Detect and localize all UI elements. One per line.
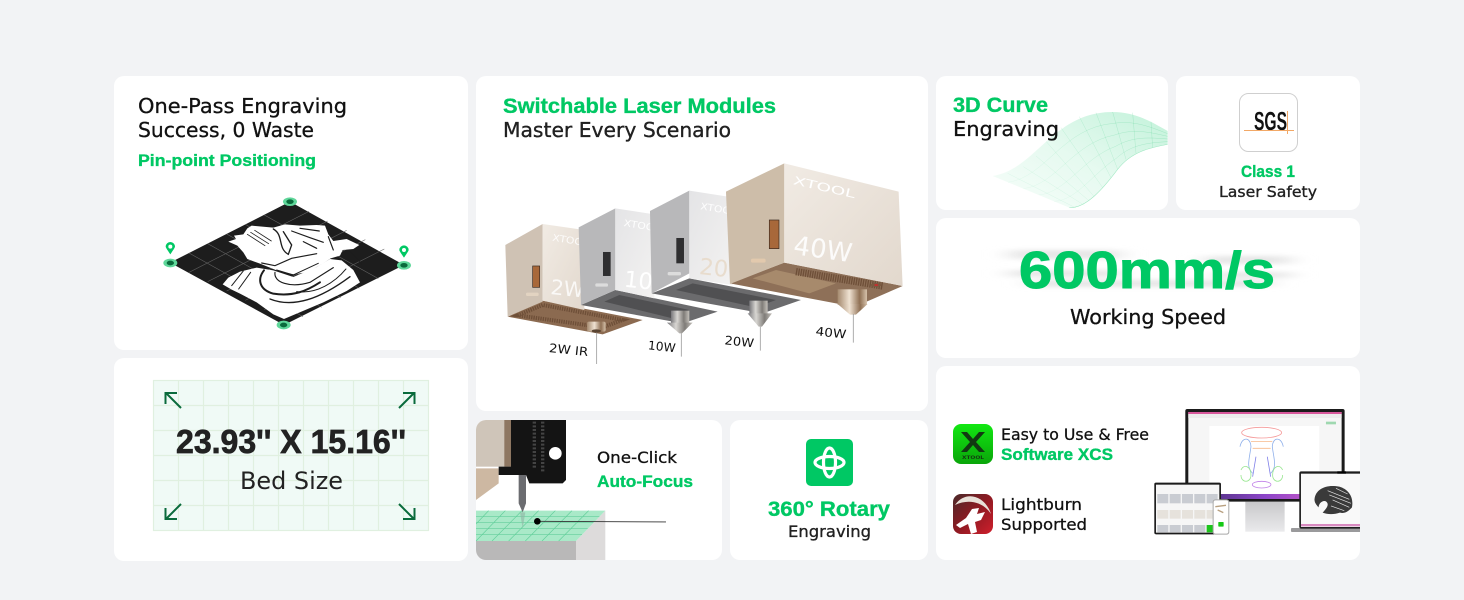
label: 2W IR: 2W IR — [548, 341, 589, 359]
illustration: tiger engraving on positioned plate — [163, 197, 411, 329]
label: 20W: 20W — [724, 333, 755, 350]
subheading: master every scenario: Master Every Scenario — [503, 118, 731, 142]
leader lines — [597, 314, 853, 364]
heading: switchable laser modules: Switchable Laser Modules — [503, 95, 776, 118]
panel: laser safety — [1176, 76, 1360, 210]
laptop — [1291, 471, 1363, 532]
label: 40W: 40W — [815, 324, 847, 342]
motion blur streaks — [1010, 250, 1290, 287]
illustration: four laser modules — [505, 163, 903, 364]
label: supported: Supported — [1001, 515, 1087, 534]
icon: Lightburn app — [953, 494, 993, 534]
panel: software — [936, 366, 1363, 560]
subheading: pin-point positioning: Pin-point Positioning — [138, 152, 316, 170]
module: 40W: 40W — [792, 231, 854, 269]
corner marker bottom — [277, 321, 291, 329]
panel: working speed — [936, 218, 1360, 358]
module: 2W IR: XTOOL — [552, 233, 590, 249]
illustration: curved grid surface — [993, 112, 1168, 208]
icon: XCS app: XTOOL — [962, 455, 984, 461]
label: laser safety: Laser Safety — [1219, 183, 1317, 201]
module: 40W — [726, 163, 903, 315]
label: 3D curve: 3D Curve — [953, 94, 1048, 117]
phone — [1213, 499, 1229, 535]
label: engraving: Engraving — [788, 522, 871, 541]
illustration: devices — [1154, 409, 1363, 535]
module: 10W — [579, 208, 718, 333]
module: 2W IR — [505, 224, 643, 334]
label: one-click: One-Click — [597, 448, 678, 467]
bed size value: 23.93'' X 15.16'' — [176, 423, 406, 460]
tablet — [1154, 483, 1221, 534]
icon: SGS badge: SGS — [1254, 106, 1287, 136]
label: engraving: Engraving — [953, 117, 1059, 141]
icon: XCS app — [953, 424, 993, 464]
module: 2W IR: 2W — [549, 275, 585, 302]
icon: SGS badge — [1240, 94, 1298, 152]
module: 40W: XTOOL — [792, 173, 858, 201]
icon: location pin left — [166, 242, 175, 254]
label: lightburn: Lightburn — [1001, 495, 1082, 514]
module: 10W: XTOOL — [623, 218, 662, 235]
grid background — [154, 380, 428, 530]
panel: 360 rotary — [730, 420, 928, 560]
icon: location pin right — [399, 245, 409, 258]
label: auto-focus: Auto-Focus — [597, 473, 693, 491]
label: software XCS: Software XCS — [1001, 446, 1113, 464]
panel: bed size — [114, 358, 468, 561]
panel: auto-focus — [476, 420, 722, 560]
illustration: laser head focusing on material — [476, 420, 666, 560]
speed label: Working Speed — [1070, 305, 1226, 329]
module: 10W: 10W — [623, 267, 676, 298]
module: 20W — [650, 191, 801, 327]
corner marker right — [397, 261, 411, 270]
heading: one-pass engraving: Success, 0 Waste — [138, 118, 314, 142]
label: easy to use and free: Easy to Use & Free — [1001, 425, 1149, 444]
heading: one-pass engraving — [138, 94, 347, 142]
bed size label: Bed Size — [240, 467, 343, 495]
panel: switchable laser modules — [476, 76, 928, 411]
panel: 3D curve engraving — [936, 76, 1168, 210]
heading: one-pass engraving: One-Pass Engraving — [138, 94, 347, 118]
monitor — [1185, 409, 1345, 532]
icon: rotary — [806, 439, 853, 486]
arrows: four corners — [166, 393, 414, 519]
label: 10W: 10W — [647, 338, 676, 355]
speed value: 600mm/s — [1019, 242, 1275, 300]
corner marker left — [163, 259, 177, 267]
label: 360 rotary: 360° Rotary — [768, 498, 890, 521]
module: 20W: 20W — [698, 254, 752, 285]
panel: one-pass engraving — [114, 76, 468, 350]
corner marker top — [283, 197, 297, 206]
label: class 1: Class 1 — [1241, 163, 1295, 181]
module: 20W: XTOOL — [700, 201, 738, 218]
